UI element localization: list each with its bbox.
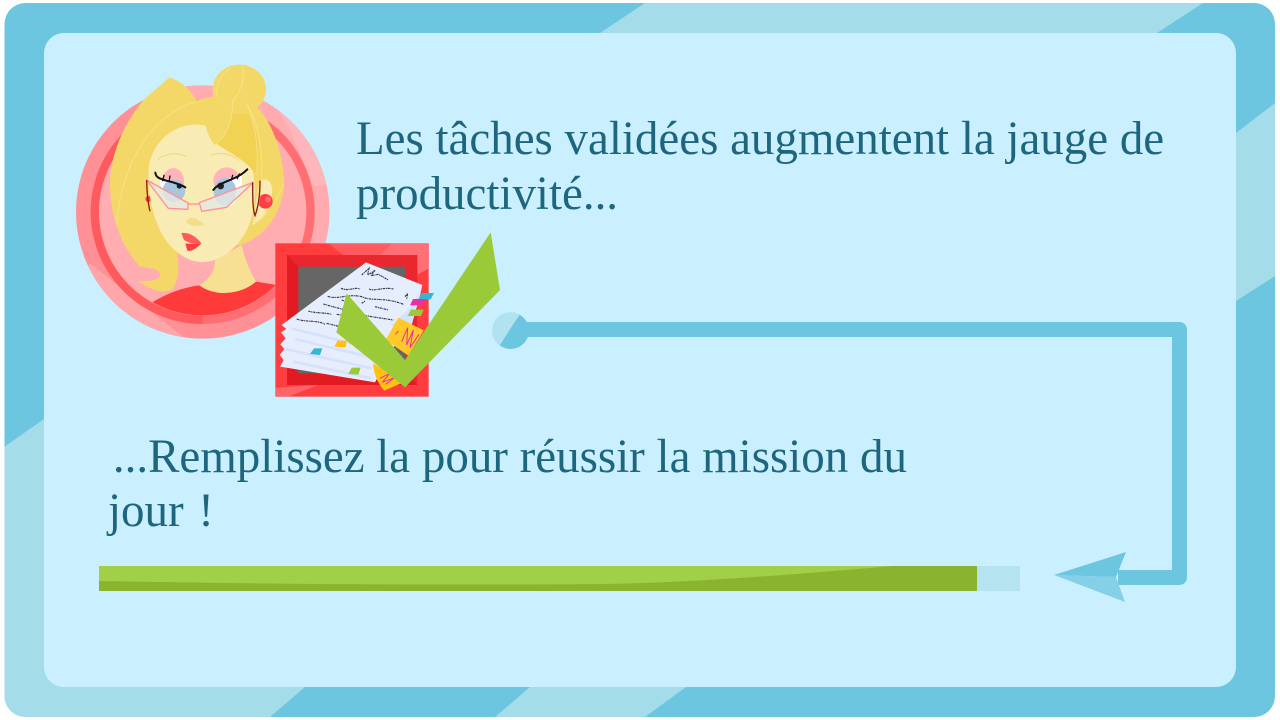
heading text top: productivité... (356, 167, 618, 220)
heading text bottom (106, 430, 907, 537)
avatar: woman with glasses (76, 64, 330, 339)
avatar disc (76, 85, 330, 339)
face (148, 125, 255, 262)
heading connector line (485, 308, 1180, 602)
hair bun (213, 65, 266, 114)
check mark (336, 232, 500, 387)
heading text bottom: ...Remplissez la pour réussir la mission du (113, 430, 907, 483)
paper stack (280, 262, 434, 391)
eyes (163, 168, 184, 193)
heading text top: Les tâches validées augmentent la jauge de (356, 112, 1164, 165)
hair highlights (117, 67, 284, 223)
handwriting (297, 268, 408, 330)
ear and earring (253, 179, 272, 225)
hair fringe (205, 97, 259, 174)
shirt (152, 282, 276, 316)
hair back (110, 77, 284, 291)
tabs (418, 293, 434, 299)
red frame (275, 243, 429, 397)
heading text top (356, 112, 1164, 220)
arrow head (1054, 552, 1126, 602)
sticky notes (386, 318, 424, 356)
document with check mark (275, 232, 500, 397)
nose (186, 218, 204, 226)
heading text bottom: jour ! (108, 484, 214, 537)
eyebrows (158, 153, 239, 161)
neck (199, 245, 256, 293)
connector start dot (492, 312, 528, 349)
glasses (147, 180, 260, 216)
progress bar (99, 566, 1020, 591)
eyelashes (155, 169, 247, 190)
lips (181, 233, 201, 244)
